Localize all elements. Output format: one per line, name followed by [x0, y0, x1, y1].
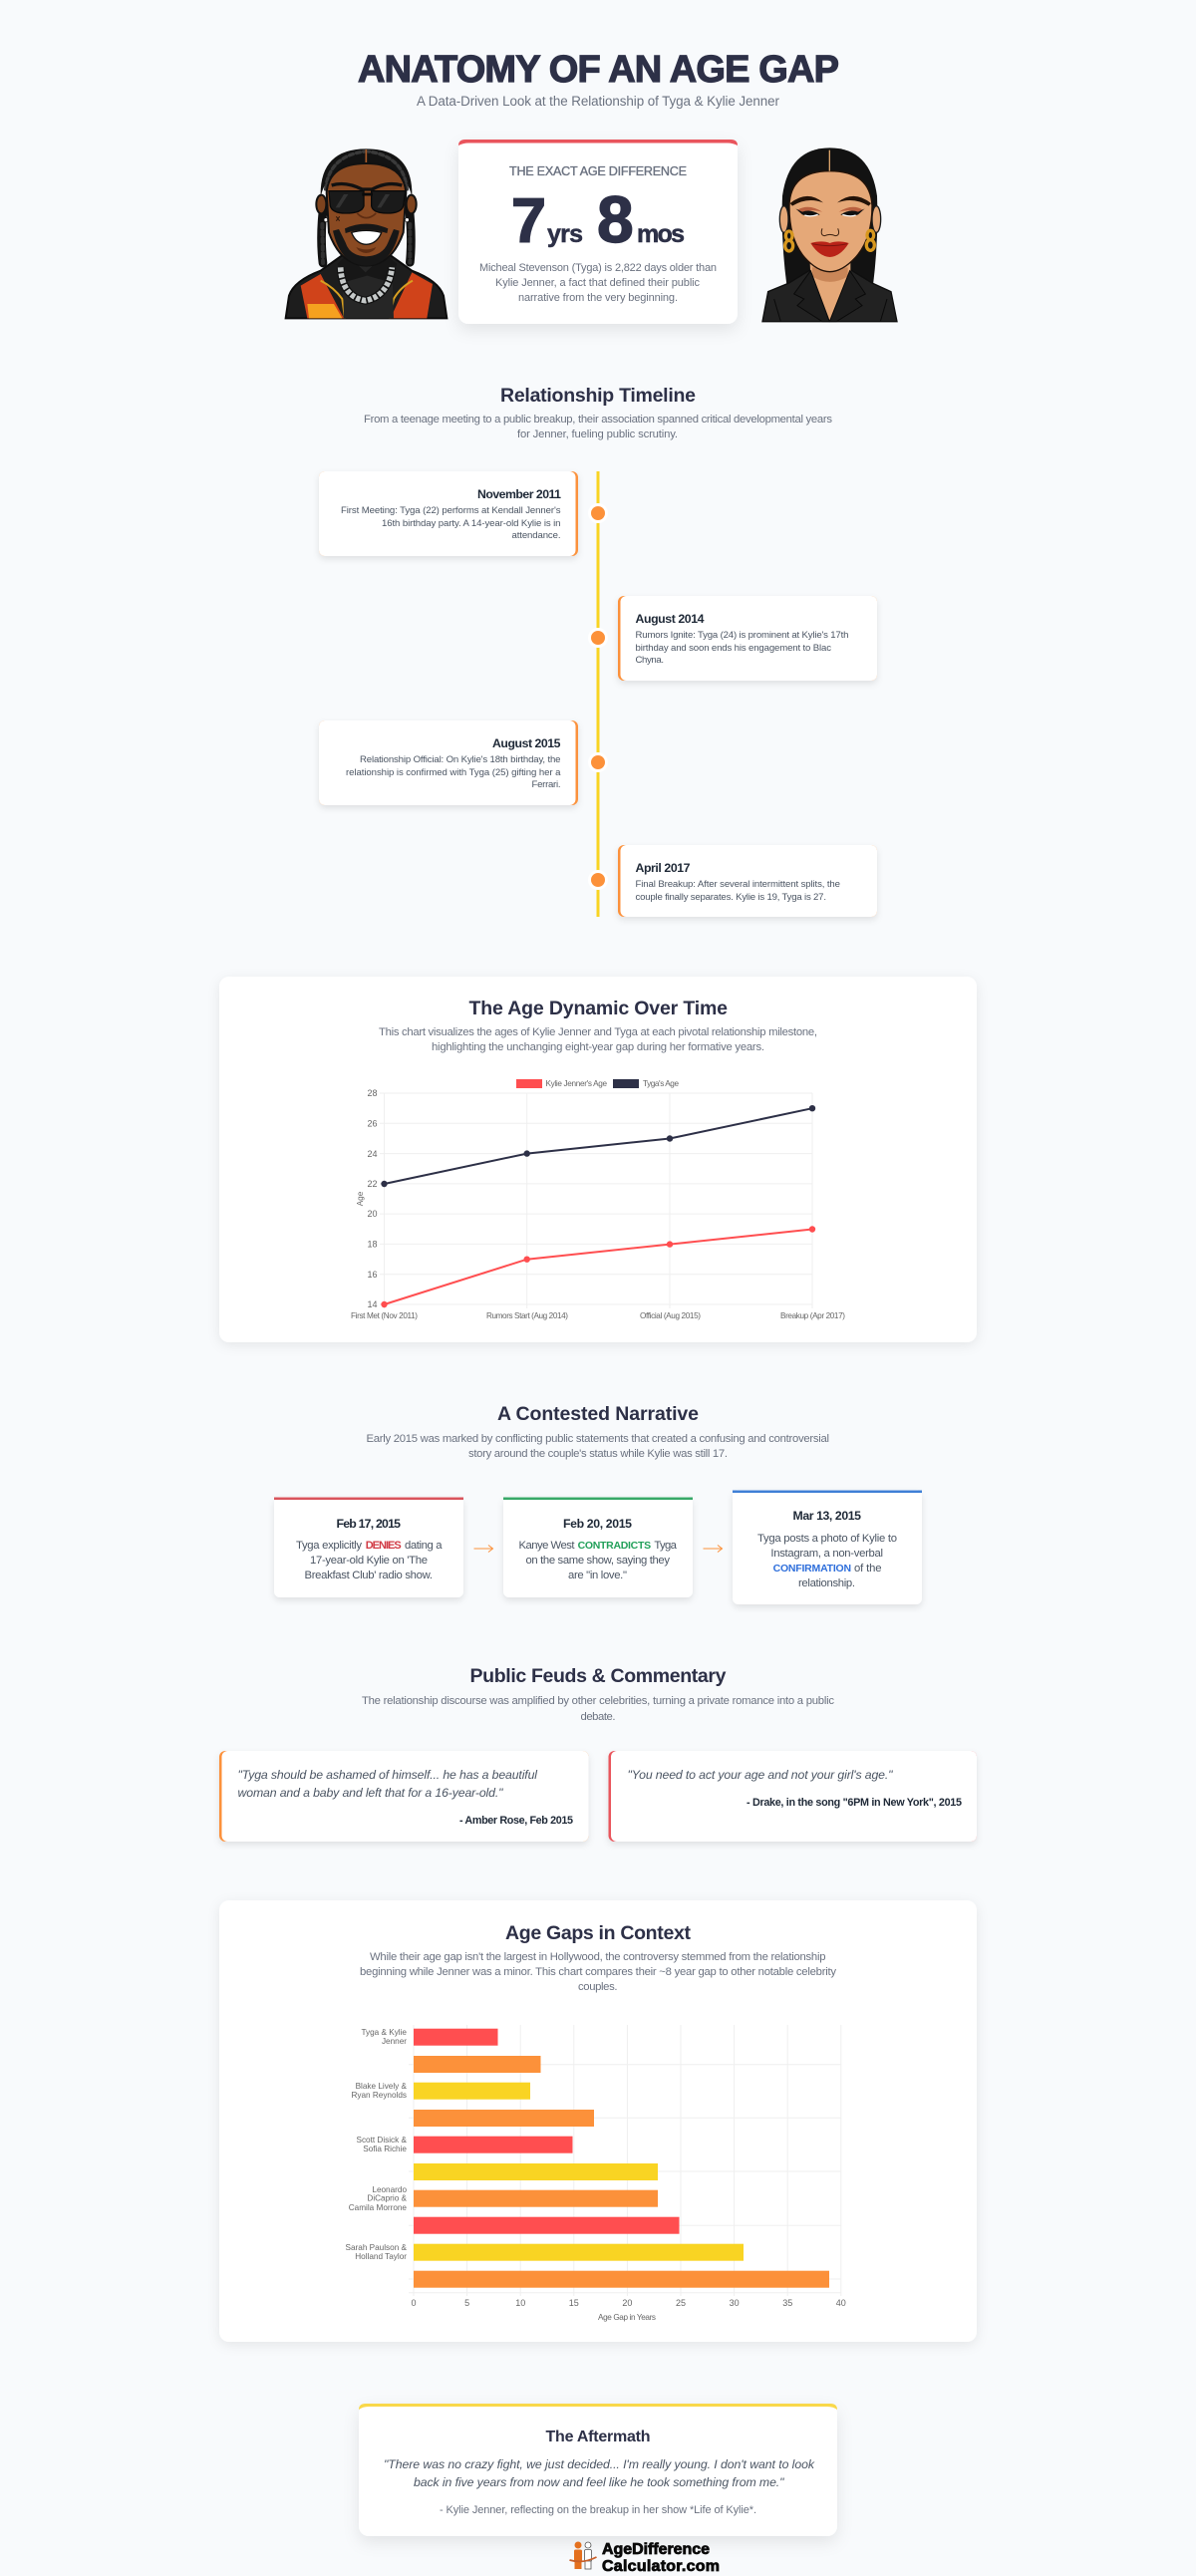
- x axis labels: [351, 1311, 845, 1320]
- timeline line: [596, 471, 600, 917]
- chart intro: [379, 1026, 817, 1053]
- panel: age gaps bar chart: [219, 1900, 977, 2342]
- heading: age dynamic: The Age Dynamic Over Time: [468, 998, 728, 1019]
- narrative intro: [367, 1433, 829, 1460]
- x axis labels: Breakup (Apr 2017): [780, 1311, 845, 1320]
- legend: [516, 1079, 679, 1088]
- card: Mar 13 confirmation: Tyga posts a photo of Kylie to: [757, 1533, 897, 1545]
- big number: 7 yrs 8 mos: yrs: [547, 220, 583, 248]
- age gaps intro: beginning while Jenner was a minor. This chart compares their ~8 year gap to other notable celebrity: [360, 1966, 836, 1978]
- icon: Kylie cartoon avatar: [762, 147, 897, 322]
- logo text: [602, 2541, 720, 2575]
- panel: age dynamic line chart: [219, 977, 977, 1342]
- category labels: [346, 2028, 408, 2261]
- x axis labels: [411, 2298, 846, 2308]
- timeline card: November 2011: 16th birthday party. A 14-year-old Kylie is in: [382, 518, 560, 529]
- card: Mar 13 confirmation: relationship.: [798, 1577, 855, 1589]
- timeline dot 1: [590, 504, 606, 522]
- category labels: Tyga & Kylie: [361, 2028, 407, 2037]
- category labels: Ryan Reynolds: [351, 2091, 407, 2100]
- y axis labels: 26: [367, 1118, 377, 1128]
- timeline card: August 2014: [618, 596, 877, 681]
- subtitle: A Data-Driven Look at the Relationship of Tyga & Kylie Jenner: [417, 94, 780, 109]
- timeline card: November 2011: [319, 471, 578, 556]
- logo text: AgeDifference: [602, 2541, 710, 2558]
- logo: AgeDifferenceCalculator.com: [570, 2541, 720, 2575]
- card: Feb 20 contradiction: are "in love.": [568, 1570, 627, 1581]
- y axis labels: 18: [367, 1240, 377, 1250]
- panel: the aftermath: [359, 2404, 837, 2536]
- card: Mar 13 confirmation: of the: [854, 1563, 881, 1574]
- legend: Tyga's Age: [643, 1079, 679, 1088]
- card: Feb 17 denial: dating a: [405, 1540, 443, 1552]
- timeline card: April 2017: Final Breakup: After several intermittent splits, the: [636, 879, 840, 890]
- line chart: [351, 1079, 845, 1320]
- timeline card: August 2015: relationship is confirmed with Tyga (25) gifting her a: [346, 767, 561, 778]
- category labels: DiCaprio &: [367, 2194, 408, 2202]
- arrow 2: [704, 1545, 722, 1553]
- big number: 7 yrs 8 mos: mos: [637, 220, 685, 248]
- heading: age gaps: Age Gaps in Context: [505, 1922, 692, 1944]
- heading: contested narrative: A Contested Narrative: [497, 1403, 699, 1425]
- quote card: Drake: - Drake, in the song "6PM in New York", 2015: [747, 1797, 962, 1809]
- arrow 1: [474, 1545, 492, 1553]
- y axis labels: 22: [367, 1179, 377, 1189]
- x axis labels: 40: [836, 2298, 846, 2308]
- series: Kylie age: [381, 1226, 815, 1307]
- feuds intro: [362, 1695, 834, 1723]
- quote: [384, 2457, 815, 2489]
- x axis labels: 0: [411, 2298, 417, 2308]
- x axis labels: 10: [515, 2298, 525, 2308]
- y axis title: Age: [356, 1191, 365, 1206]
- y axis labels: 16: [367, 1270, 377, 1280]
- y axis labels: 20: [367, 1209, 377, 1219]
- big number: 7 yrs 8 mos: 8: [597, 182, 634, 256]
- x axis labels: 20: [622, 2298, 632, 2308]
- legend: Kylie Jenner's Age: [546, 1079, 607, 1088]
- category labels: Scott Disick &: [356, 2136, 408, 2145]
- feuds intro: debate.: [580, 1711, 616, 1723]
- timeline card: August 2015: Relationship Official: On Kylie's 18th birthday, the: [360, 754, 560, 765]
- x axis labels: 15: [569, 2298, 579, 2308]
- heading: aftermath: The Aftermath: [546, 2429, 650, 2445]
- age gaps intro: [360, 1951, 836, 1993]
- x axis title: Age Gap in Years: [598, 2313, 656, 2322]
- quote card: Amber Rose: woman and a baby and left that for a 16-year-old.": [237, 1786, 503, 1800]
- timeline card: April 2017: April 2017: [636, 861, 691, 875]
- timeline card: November 2011: November 2011: [477, 487, 561, 501]
- card: Feb 20 contradiction: Feb 20, 2015: [563, 1517, 632, 1531]
- card: Feb 17 denial: [274, 1497, 463, 1597]
- icon: Tyga cartoon avatar: [286, 148, 447, 318]
- category labels: Leonardo: [372, 2185, 407, 2194]
- icon: two people: [570, 2541, 596, 2569]
- timeline card: August 2015: August 2015: [492, 736, 561, 750]
- heading: public feuds: Public Feuds & Commentary: [470, 1665, 727, 1687]
- quote card: Amber Rose: [219, 1751, 588, 1842]
- big number: 7 yrs 8 mos: 7: [511, 186, 546, 256]
- card: Feb 17 denial: Tyga explicitly: [296, 1540, 362, 1552]
- y axis labels: 28: [367, 1088, 377, 1098]
- description: [479, 262, 717, 304]
- timeline dot 4: [590, 871, 606, 889]
- x axis labels: 35: [782, 2298, 792, 2308]
- x axis labels: Rumors Start (Aug 2014): [486, 1311, 568, 1320]
- timeline card: August 2014: Rumors Ignite: Tyga (24) is prominent at Kylie's 17th: [636, 630, 849, 641]
- card: Mar 13 confirmation: CONFIRMATION: [773, 1563, 851, 1574]
- panel: exact age difference: [458, 140, 738, 324]
- heading: exact age difference: THE EXACT AGE DIFFERENCE: [509, 164, 687, 178]
- y axis labels: 14: [367, 1299, 377, 1309]
- x axis labels: 30: [730, 2298, 740, 2308]
- attribution: - Kylie Jenner, reflecting on the breakup in her show *Life of Kylie*.: [440, 2504, 756, 2516]
- category labels: Camila Morrone: [349, 2203, 407, 2212]
- narrative intro: Early 2015 was marked by conflicting public statements that created a confusing and controversial: [367, 1433, 829, 1445]
- series: Tyga age: [381, 1105, 815, 1187]
- card: Mar 13 confirmation: Mar 13, 2015: [793, 1509, 861, 1523]
- card: Feb 20 contradiction: [503, 1497, 693, 1597]
- timeline card: April 2017: [618, 845, 877, 917]
- timeline card: August 2015: Ferrari.: [532, 779, 560, 790]
- card: Mar 13 confirmation: [733, 1490, 922, 1604]
- timeline intro: From a teenage meeting to a public breakup, their association spanned critical developmental years: [364, 414, 832, 426]
- chart intro: This chart visualizes the ages of Kylie Jenner and Tyga at each pivotal relationship milestone,: [379, 1026, 817, 1038]
- quote: "There was no crazy fight, we just decided... I'm really young. I don't want to look: [384, 2457, 815, 2471]
- timeline dot 2: [590, 630, 606, 646]
- description: Micheal Stevenson (Tyga) is 2,822 days older than: [479, 262, 717, 274]
- category labels: Sarah Paulson &: [346, 2243, 408, 2252]
- timeline card: November 2011: attendance.: [512, 530, 560, 541]
- chart intro: highlighting the unchanging eight-year gap during her formative years.: [432, 1041, 764, 1053]
- category labels: Jenner: [382, 2037, 407, 2046]
- quote card: Amber Rose: "Tyga should be ashamed of himself... he has a beautiful: [237, 1768, 538, 1782]
- x axis labels: Official (Aug 2015): [640, 1311, 701, 1320]
- card: Feb 17 denial: DENIES: [366, 1540, 402, 1552]
- big number: 7 yrs 8 mos: [511, 182, 685, 256]
- category labels: Holland Taylor: [355, 2252, 407, 2261]
- timeline card: August 2014: Chyna.: [636, 655, 664, 666]
- quote card: Amber Rose: - Amber Rose, Feb 2015: [459, 1815, 573, 1827]
- x axis labels: First Met (Nov 2011): [351, 1311, 418, 1320]
- narrative intro: story around the couple's status while Kylie was still 17.: [468, 1448, 728, 1460]
- quote: back in five years from now and feel like he took something from me.": [414, 2475, 784, 2489]
- timeline card: August 2014: birthday and soon ends his engagement to Blac: [636, 643, 831, 654]
- feuds intro: The relationship discourse was amplified by other celebrities, turning a private romance into a public: [362, 1695, 834, 1707]
- category labels: Blake Lively &: [356, 2082, 408, 2091]
- category labels: Sofia Richie: [363, 2145, 407, 2153]
- card: Feb 20 contradiction: on the same show, saying they: [526, 1555, 670, 1567]
- y axis labels: 24: [367, 1149, 377, 1159]
- description: narrative from the very beginning.: [518, 292, 678, 304]
- timeline card: August 2015: [319, 720, 578, 805]
- age gaps intro: While their age gap isn't the largest in Hollywood, the controversy stemmed from the relationship: [370, 1951, 825, 1963]
- card: Mar 13 confirmation: Instagram, a non-verbal: [770, 1548, 883, 1560]
- bars: [414, 2029, 829, 2288]
- timeline card: April 2017: couple finally separates. Kylie is 19, Tyga is 27.: [636, 892, 826, 903]
- card: Feb 20 contradiction: Kanye West: [518, 1540, 575, 1552]
- timeline card: August 2014: August 2014: [636, 612, 705, 626]
- logo text: Calculator.com: [602, 2558, 720, 2575]
- timeline dot 3: [590, 753, 606, 771]
- quote card: Drake: "You need to act your age and not your girl's age.": [628, 1768, 893, 1782]
- heading: relationship timeline: Relationship Timeline: [500, 385, 696, 407]
- age gaps intro: couples.: [578, 1981, 618, 1993]
- x axis labels: 5: [464, 2298, 469, 2308]
- x axis labels: 25: [676, 2298, 686, 2308]
- bar chart: [346, 2025, 846, 2322]
- timeline card: November 2011: First Meeting: Tyga (22) performs at Kendall Jenner's: [341, 505, 561, 516]
- card: Feb 17 denial: 17-year-old Kylie on 'The: [310, 1555, 428, 1567]
- card: Feb 20 contradiction: Tyga: [654, 1540, 678, 1552]
- card: Feb 17 denial: Breakfast Club' radio show.: [305, 1570, 433, 1581]
- description: Kylie Jenner, a fact that defined their public: [495, 277, 700, 289]
- timeline intro: for Jenner, fueling public scrutiny.: [517, 429, 678, 440]
- y axis labels: [367, 1088, 377, 1309]
- timeline intro: [364, 414, 832, 440]
- card: Feb 17 denial: Feb 17, 2015: [337, 1517, 401, 1531]
- card: Feb 20 contradiction: CONTRADICTS: [578, 1540, 651, 1552]
- title: ANATOMY OF AN AGE GAP: [358, 49, 839, 91]
- quote card: Drake: [608, 1751, 977, 1842]
